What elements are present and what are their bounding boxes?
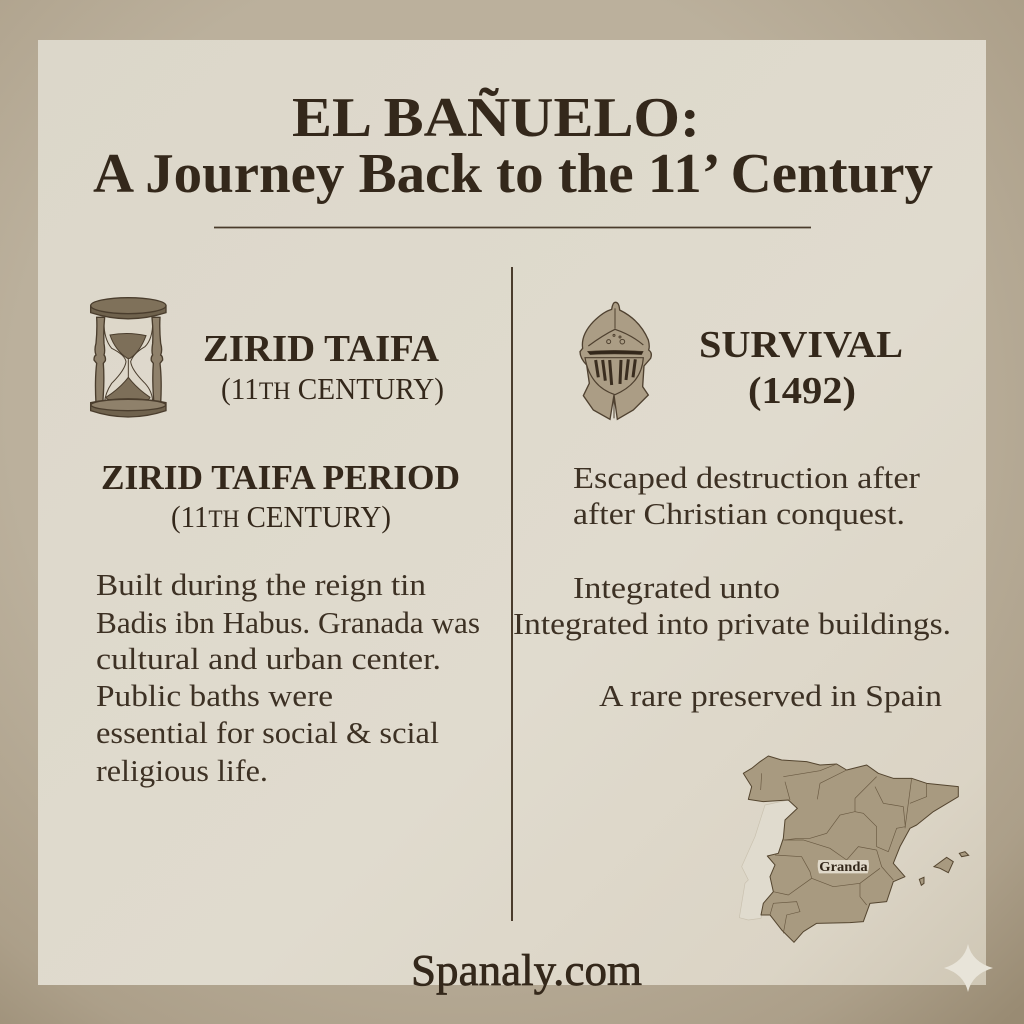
text block: survival description xyxy=(513,460,951,713)
title xyxy=(93,87,933,205)
text block: Zirid description: Badis ibn Habus. Granada was xyxy=(96,605,480,640)
subheading: Zirid Taifa period: ZIRID TAIFA PERIOD xyxy=(101,458,460,497)
text block: Zirid description: Built during the reign tin xyxy=(96,567,427,602)
heading: Zirid Taifa: ZIRID TAIFA xyxy=(203,328,440,370)
text block: Zirid description: cultural and urban center. xyxy=(96,641,441,676)
text block: survival description: Integrated into private buildings. xyxy=(513,606,951,641)
heading: Survival xyxy=(699,324,903,412)
heading: Zirid Taifa: (11TH CENTURY) xyxy=(221,371,444,406)
text block: survival description: Integrated unto xyxy=(573,570,780,605)
map of Spain: Granda xyxy=(819,860,868,875)
title: A Journey Back to the 11’ Century xyxy=(93,143,933,205)
Balearic islands xyxy=(919,852,969,885)
heading: Survival: SURVIVAL xyxy=(699,324,903,366)
Portugal xyxy=(739,800,797,920)
heading: Zirid Taifa xyxy=(203,328,444,406)
text block: survival description: Escaped destruction after xyxy=(573,460,921,495)
subheading: Zirid Taifa period xyxy=(101,458,460,534)
map of Spain xyxy=(739,756,969,942)
heading: Survival: (1492) xyxy=(748,370,856,412)
text block: survival description: A rare preserved in Spain xyxy=(599,678,943,713)
icon: sparkle xyxy=(944,944,993,992)
Spain mainland xyxy=(743,756,958,942)
text block: Zirid description: essential for social & scial xyxy=(96,715,439,750)
icon: knight helmet xyxy=(580,302,651,419)
text block: Zirid description: Public baths were xyxy=(96,678,333,713)
text block: Zirid description xyxy=(96,567,480,788)
title: EL BAÑUELO: xyxy=(292,87,700,149)
icon: hourglass xyxy=(91,298,166,417)
subheading: Zirid Taifa period: (11TH CENTURY) xyxy=(171,499,391,534)
text block: Zirid description: religious life. xyxy=(96,753,268,788)
footer: website: Spanaly.com xyxy=(411,946,642,995)
text block: survival description: after Christian conquest. xyxy=(573,496,905,531)
